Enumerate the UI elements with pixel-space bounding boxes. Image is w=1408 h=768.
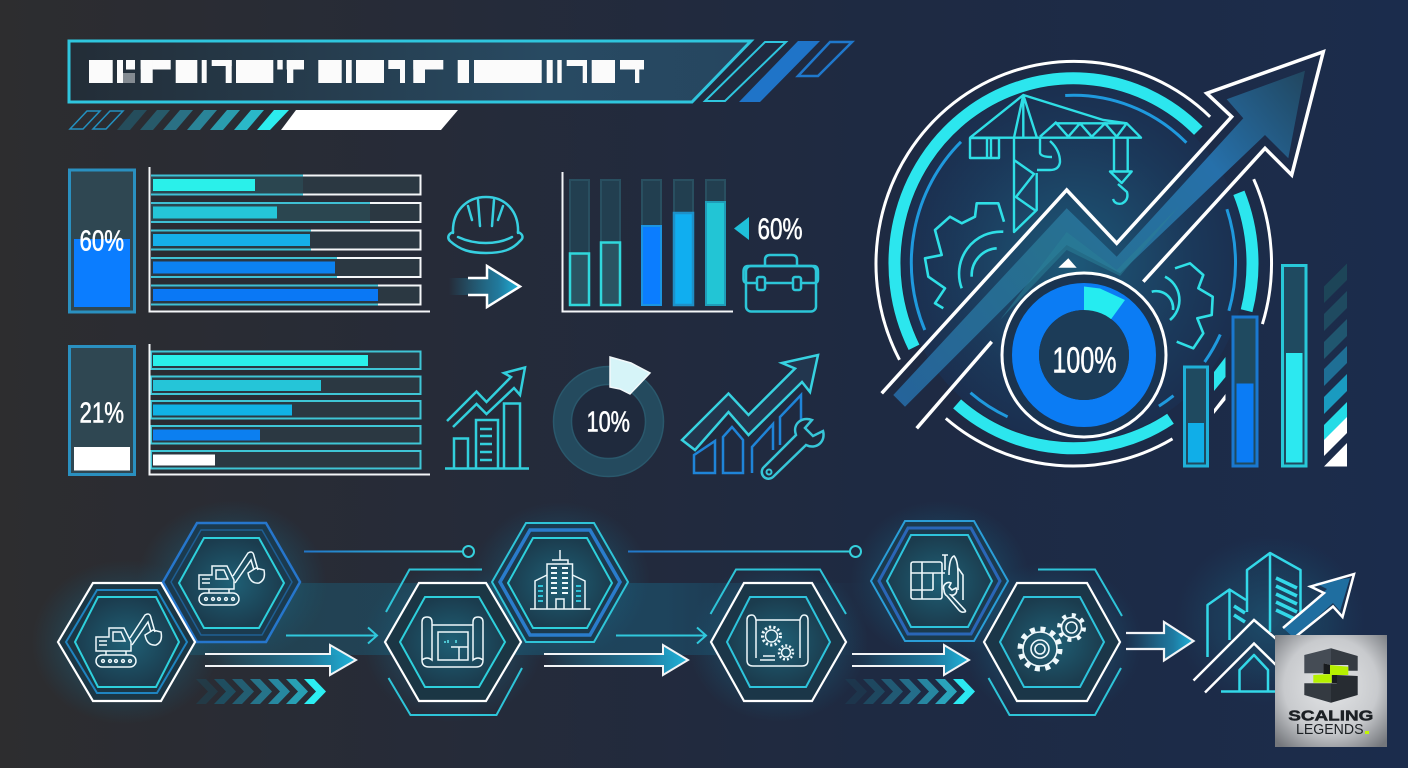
icon: office building bbox=[530, 550, 590, 609]
donut gauge: 100% bbox=[1002, 273, 1166, 437]
icon: right gear bbox=[1152, 263, 1213, 348]
chevrons 2 bbox=[845, 679, 975, 704]
label 21%: 21% bbox=[80, 398, 124, 430]
chart: vertical bars bbox=[562, 172, 733, 312]
thin arrow 1 bbox=[286, 628, 377, 644]
chevrons 1 bbox=[196, 679, 326, 704]
callout: 60% bbox=[734, 213, 802, 246]
icon: excavator bbox=[199, 552, 264, 605]
step 1: hexagon with excavator bbox=[58, 583, 195, 701]
cyan ring segments bbox=[894, 78, 1253, 448]
connector line 2 bbox=[628, 546, 861, 557]
chart: hero stacked bars bbox=[1184, 266, 1306, 466]
double arrow 3 bbox=[852, 645, 969, 675]
hazard stripes bbox=[1324, 264, 1347, 466]
icon: blueprint floor plan bbox=[422, 617, 483, 667]
panel: 60% progress gauge bbox=[70, 170, 134, 312]
thin arrow 2 bbox=[616, 628, 706, 644]
icon: left gear bbox=[925, 203, 1004, 308]
icon: growth arrow with wrench bbox=[682, 355, 824, 479]
main growth arrow bbox=[882, 52, 1323, 428]
process band bbox=[190, 583, 870, 655]
chart: lower horizontal bars bbox=[150, 344, 430, 474]
label 60%: 60% bbox=[80, 226, 124, 258]
icon: tower crane bbox=[970, 95, 1141, 232]
outer white ring segments bbox=[876, 61, 1272, 466]
donut chart: 10% bbox=[554, 357, 664, 476]
step 7: hexagon with gears bbox=[984, 570, 1122, 715]
double arrow 1 bbox=[205, 645, 356, 675]
icon: hard hat bbox=[448, 197, 522, 253]
icon: two gears bbox=[1020, 615, 1084, 669]
title banner bbox=[69, 41, 852, 102]
process glows bbox=[31, 500, 1365, 724]
callout: 60%: 60% bbox=[758, 213, 802, 246]
icon: toolbox bbox=[744, 255, 818, 312]
icon: city skyline with growth arrow bbox=[1194, 553, 1354, 692]
step 6: hexagon with blueprint tools bbox=[871, 521, 1008, 641]
logo mark bbox=[1304, 648, 1358, 703]
icon: excavator bbox=[96, 614, 161, 667]
icon: right arrow bbox=[449, 266, 520, 307]
banner frame bbox=[69, 41, 751, 102]
logo wordmark: LEGENDS bbox=[1296, 721, 1364, 738]
double arrow 2 bbox=[544, 645, 688, 675]
logo wordmark: SCALING bbox=[1288, 708, 1373, 725]
panel: hero circle with crane, arrow and gauge bbox=[876, 52, 1323, 466]
icon: growth bars bbox=[445, 368, 529, 468]
icon: gear blueprint bbox=[747, 615, 808, 666]
title (illegible block lettering) bbox=[89, 60, 644, 83]
stripes behind first bar bbox=[1214, 357, 1226, 391]
label 100%: 100% bbox=[1052, 340, 1116, 380]
banner accent stripes bbox=[705, 42, 786, 101]
logo: Scaling Legends bbox=[1275, 635, 1387, 747]
connector line 1 bbox=[304, 546, 474, 557]
label 10%: 10% bbox=[586, 406, 630, 438]
thin blue ring segments bbox=[911, 95, 1236, 417]
subtitle stripe bar bbox=[70, 110, 458, 130]
chart: upper horizontal bars bbox=[150, 167, 430, 312]
panel: 21% progress gauge bbox=[70, 346, 134, 474]
step 2: hexagon with excavator bbox=[163, 523, 300, 642]
logo wordmark bbox=[1288, 708, 1373, 738]
icon: blueprint and wrench bbox=[911, 555, 966, 612]
step 4: hexagon with office building bbox=[492, 523, 628, 642]
step 3: hexagon with floor plan bbox=[385, 570, 522, 715]
step 5: hexagon with gear blueprint bbox=[710, 570, 846, 701]
arrow to city bbox=[1126, 622, 1194, 660]
